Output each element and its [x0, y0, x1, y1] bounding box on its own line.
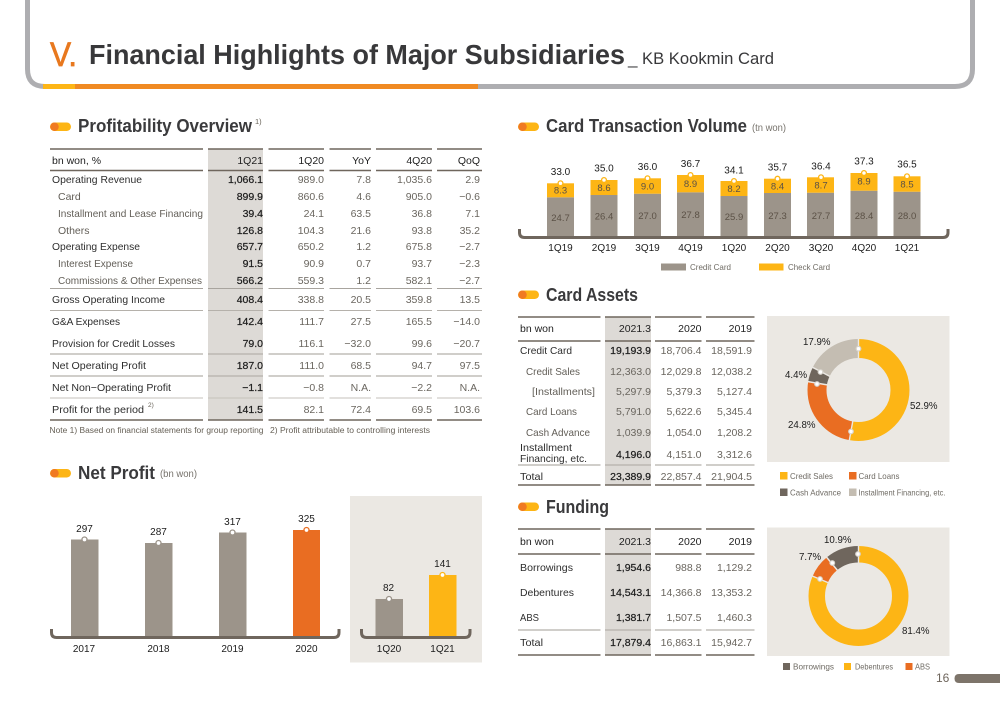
panel: quarterly net profit chart: 1Q20 — [377, 644, 402, 655]
table: funding: bn won — [520, 536, 554, 548]
table: profitability overview: 4.6 — [356, 191, 371, 203]
panel: funding donut chart: 7.7% — [799, 552, 821, 563]
heading: Funding: Funding — [546, 497, 609, 517]
table: profitability overview: Others — [58, 225, 90, 237]
title: _ — [627, 49, 638, 68]
panel: card assets donut chart: 17.9% — [803, 337, 831, 348]
bar chart: annual net profit: 2018 — [147, 644, 170, 655]
table: card assets: 3,312.6 — [717, 449, 752, 461]
bar chart: annual net profit: 2020 — [295, 644, 318, 655]
panel: quarterly net profit chart: 82 — [383, 583, 394, 594]
stacked bar chart: card transaction volume: 37.3 — [854, 157, 874, 168]
table: funding: 1,381.7 — [616, 612, 651, 624]
table: profitability overview: 860.6 — [298, 191, 324, 203]
stacked bar chart: card transaction volume: 1Q21 — [895, 243, 920, 254]
table: profitability overview: 63.5 — [351, 208, 371, 220]
heading: Net Profit: (bn won) — [160, 469, 197, 480]
title — [50, 36, 774, 74]
table: profitability overview: 111.0 — [299, 360, 324, 372]
table: profitability overview: bn won, % — [52, 155, 101, 167]
page number: 16 — [936, 671, 950, 685]
table: profitability overview: 1Q20 — [298, 155, 324, 167]
table: profitability overview: 7.1 — [465, 208, 480, 220]
table: profitability overview: 187.0 — [237, 360, 263, 372]
table: card assets: Cash Advance — [526, 427, 590, 439]
heading: Profitability Overview: Profitability Overview — [78, 116, 253, 136]
bar chart: annual net profit: 287 — [150, 527, 167, 538]
panel: quarterly net profit chart: 1Q21 — [430, 644, 455, 655]
panel: funding donut chart: 10.9% — [824, 535, 852, 546]
table: profitability overview: N.A. — [351, 382, 371, 394]
header frame — [28, 0, 972, 89]
stacked bar chart: card transaction volume: 4Q19 — [678, 243, 703, 254]
table: profitability overview: 566.2 — [237, 275, 263, 287]
table: profitability overview: YoY — [352, 155, 371, 167]
stacked bar chart: card transaction volume: 36.7 — [681, 159, 701, 170]
table: profitability overview: 126.8 — [237, 225, 263, 237]
table: card assets: 2020 — [678, 323, 702, 335]
page number — [936, 671, 1000, 685]
table: profitability overview: Provision for Credit Losses — [52, 338, 175, 350]
table: card assets: 12,363.0 — [610, 366, 651, 378]
table: card assets: 2021.3 — [619, 323, 651, 335]
title: KB Kookmin Card — [642, 49, 774, 68]
table: funding: 2020 — [678, 536, 702, 548]
heading: Card Assets — [518, 285, 638, 305]
table: funding: 15,942.7 — [711, 637, 752, 649]
table: profitability overview: −1.1 — [242, 382, 263, 394]
stacked bar chart: card transaction volume: 27.3 — [768, 211, 787, 222]
table: profitability overview: 13.5 — [460, 294, 480, 306]
bar chart: annual net profit: 317 — [224, 517, 241, 528]
table: profitability overview: 90.9 — [304, 258, 324, 270]
legend: card assets — [780, 471, 946, 498]
stacked bar chart: card transaction volume: 2Q20 — [765, 243, 790, 254]
stacked bar chart: card transaction volume: 9.0 — [641, 182, 654, 192]
table: profitability overview: Net Operating Profit — [52, 360, 146, 372]
table: card assets: 1,039.9 — [616, 427, 651, 439]
table: card assets: 12,029.8 — [661, 366, 702, 378]
heading: Card Assets: Card Assets — [546, 285, 638, 305]
table: profitability overview — [50, 149, 482, 420]
table: funding: 17,879.4 — [610, 637, 651, 649]
table: funding: 2019 — [729, 536, 752, 548]
table: profitability overview: Net Non−Operating Profit — [52, 382, 171, 394]
table: profitability overview: QoQ — [458, 155, 480, 167]
table: card assets: 1,208.2 — [717, 427, 752, 439]
table: profitability overview: 20.5 — [351, 294, 371, 306]
table: profitability overview: G&A Expenses — [52, 316, 120, 328]
stacked bar chart: card transaction volume: 8.9 — [857, 176, 871, 188]
table: card assets: 21,904.5 — [711, 471, 752, 483]
table: profitability overview: Operating Revenue — [52, 174, 142, 186]
table: funding: 988.8 — [675, 562, 702, 574]
table: profitability overview: Operating Expense — [52, 241, 140, 253]
table: funding: 2021.3 — [619, 536, 651, 548]
stacked bar chart: card transaction volume — [520, 157, 948, 254]
stacked bar chart: card transaction volume: 2Q19 — [592, 243, 617, 254]
heading: Profitability Overview: 1) — [255, 117, 262, 126]
legend: card transaction volume — [661, 262, 830, 272]
panel: card assets donut chart — [767, 316, 950, 462]
table: profitability overview: 72.4 — [351, 404, 371, 416]
stacked bar chart: card transaction volume: 3Q19 — [635, 243, 660, 254]
bar chart: annual net profit — [52, 514, 339, 655]
stacked bar chart: card transaction volume: 36.0 — [638, 162, 658, 173]
table: profitability overview: 1.2 — [356, 241, 371, 253]
table: profitability overview: 1Q21 — [237, 155, 263, 167]
panel: quarterly net profit chart: 141 — [434, 559, 451, 570]
table note: 2) Profit attributable to controlling interests — [270, 426, 430, 435]
table note: Note 1) Based on financial statements for group reporting — [50, 426, 264, 435]
stacked bar chart: card transaction volume: 8.5 — [900, 180, 914, 190]
table: profitability overview: −2.7 — [459, 241, 480, 253]
table: profitability overview: 99.6 — [412, 338, 432, 350]
table: profitability overview: 559.3 — [298, 275, 324, 287]
table: card assets: 5,379.3 — [666, 386, 702, 398]
stacked bar chart: card transaction volume: 3Q20 — [809, 243, 834, 254]
table: profitability overview: 165.5 — [406, 316, 432, 328]
stacked bar chart: card transaction volume: 8.7 — [814, 180, 828, 192]
panel: funding donut chart: 81.4% — [902, 626, 930, 637]
panel: card assets donut chart: 24.8% — [788, 420, 816, 431]
stacked bar chart: card transaction volume: 4Q20 — [852, 243, 877, 254]
title: Financial Highlights of Major Subsidiaries — [89, 39, 625, 70]
table: profitability overview: −0.6 — [459, 191, 480, 203]
table: profitability overview: 7.8 — [356, 174, 371, 186]
table: profitability overview: Card — [58, 191, 81, 203]
table: card assets: 4,151.0 — [666, 449, 702, 461]
table: profitability overview: 2) — [148, 402, 154, 409]
table: profitability overview: 104.3 — [298, 225, 324, 237]
stacked bar chart: card transaction volume: 1Q20 — [722, 243, 747, 254]
stacked bar chart: card transaction volume: 8.9 — [684, 179, 697, 190]
table: profitability overview: 35.2 — [460, 225, 480, 237]
table: profitability overview: Commissions & Other Expenses — [58, 275, 202, 287]
table: profitability overview: 650.2 — [298, 241, 324, 253]
table: profitability overview: 82.1 — [304, 404, 324, 416]
table: card assets: [Installments] — [532, 386, 595, 398]
table: card assets: Credit Sales — [526, 366, 580, 378]
table: profitability overview: N.A. — [460, 382, 480, 394]
table: funding — [518, 529, 754, 655]
table: profitability overview: −2.2 — [411, 382, 432, 394]
table: profitability overview: 21.6 — [351, 225, 371, 237]
stacked bar chart: card transaction volume: 28.4 — [855, 211, 873, 222]
table: profitability overview: 675.8 — [406, 241, 432, 253]
table: profitability overview: 4Q20 — [406, 155, 432, 167]
title: V. — [50, 36, 77, 74]
panel: quarterly net profit chart — [350, 496, 482, 662]
legend: funding: Debentures — [855, 662, 893, 672]
stacked bar chart: card transaction volume: 24.7 — [551, 213, 570, 224]
table: funding: 13,353.2 — [711, 587, 752, 599]
heading: Net Profit: Net Profit — [78, 463, 155, 483]
table: funding: 1,460.3 — [717, 612, 752, 624]
table: card assets: 19,193.9 — [610, 345, 651, 357]
table: card assets: 12,038.2 — [711, 366, 752, 378]
table: funding: 1,507.5 — [666, 612, 702, 624]
table: funding: ABS — [520, 612, 539, 624]
table: profitability overview: −14.0 — [453, 316, 480, 328]
table: profitability overview: 111.7 — [299, 316, 324, 328]
stacked bar chart: card transaction volume: 28.0 — [898, 211, 916, 222]
table: card assets: 1,054.0 — [666, 427, 702, 439]
table: card assets: 18,591.9 — [711, 345, 752, 357]
table: profitability overview: 0.7 — [356, 258, 371, 270]
bar chart: annual net profit: 325 — [298, 514, 315, 525]
table: card assets: Installment — [520, 442, 572, 454]
table: funding: Borrowings — [520, 562, 573, 574]
table: profitability overview: 116.1 — [298, 338, 324, 350]
table: profitability overview: Profit for the period — [52, 404, 144, 416]
table: profitability overview: 1,035.6 — [397, 174, 432, 186]
stacked bar chart: card transaction volume: 8.4 — [771, 182, 784, 192]
stacked bar chart: card transaction volume: 25.9 — [725, 212, 743, 223]
table: funding: 14,366.8 — [661, 587, 702, 599]
table: profitability overview: 359.8 — [406, 294, 432, 306]
table: card assets: Credit Card — [520, 345, 572, 357]
legend: card transaction volume: Check Card — [788, 262, 830, 272]
stacked bar chart: card transaction volume: 26.4 — [595, 212, 613, 222]
legend: card assets: Card Loans — [858, 471, 900, 481]
table: profitability overview: 97.5 — [460, 360, 480, 372]
table: profitability overview: 408.4 — [237, 294, 263, 306]
table: card assets: 23,389.9 — [610, 471, 651, 483]
stacked bar chart: card transaction volume: 36.5 — [897, 160, 917, 171]
table: card assets: 5,791.0 — [616, 406, 651, 418]
panel: card assets donut chart: 52.9% — [910, 401, 938, 412]
heading: Funding — [518, 497, 609, 517]
legend: card assets: Cash Advance — [790, 488, 841, 498]
table: profitability overview: 27.5 — [351, 316, 371, 328]
stacked bar chart: card transaction volume: 8.6 — [597, 183, 611, 194]
table: card assets: 2019 — [729, 323, 752, 335]
table: profitability overview: −2.3 — [459, 258, 480, 270]
table: profitability overview: 657.7 — [237, 241, 263, 253]
table: profitability overview: −20.7 — [453, 338, 480, 350]
table: profitability overview: 79.0 — [243, 338, 263, 350]
table: profitability overview: Interest Expense — [58, 258, 133, 270]
heading: Net Profit — [50, 463, 197, 483]
heading: Card Transaction Volume: Card Transaction Volume — [546, 116, 747, 136]
table: profitability overview: −32.0 — [344, 338, 371, 350]
stacked bar chart: card transaction volume: 27.8 — [681, 210, 700, 221]
table: profitability overview: 91.5 — [243, 258, 263, 270]
table: funding: 16,863.1 — [661, 637, 702, 649]
table: card assets: 5,297.9 — [616, 386, 651, 398]
table: card assets: 18,706.4 — [661, 345, 702, 357]
stacked bar chart: card transaction volume: 8.3 — [554, 186, 567, 196]
legend: card transaction volume: Credit Card — [690, 262, 731, 272]
table: profitability overview: 989.0 — [298, 174, 324, 186]
panel: funding donut chart — [767, 528, 950, 656]
legend: funding: Borrowings — [793, 662, 834, 672]
table: profitability overview: 141.5 — [237, 404, 263, 416]
legend: funding: ABS — [915, 662, 930, 672]
stacked bar chart: card transaction volume: 34.1 — [724, 165, 744, 176]
table: profitability overview: 905.0 — [406, 191, 432, 203]
table: card assets: Card Loans — [526, 406, 577, 418]
table: profitability overview: 2.9 — [465, 174, 480, 186]
panel: card assets donut chart: 4.4% — [785, 370, 807, 381]
stacked bar chart: card transaction volume: 27.7 — [812, 211, 830, 222]
bar chart: annual net profit: 297 — [76, 524, 93, 535]
table: card assets: 5,345.4 — [717, 406, 752, 418]
stacked bar chart: card transaction volume: 33.0 — [551, 167, 571, 178]
table: profitability overview: −0.8 — [303, 382, 324, 394]
table: profitability overview: 94.7 — [412, 360, 432, 372]
stacked bar chart: card transaction volume: 1Q19 — [548, 243, 573, 254]
table: profitability overview: 69.5 — [412, 404, 432, 416]
table: profitability overview: Gross Operating Income — [52, 294, 165, 306]
table: profitability overview: 36.8 — [412, 208, 432, 220]
table: profitability overview: 1,066.1 — [228, 174, 263, 186]
table: funding: Total — [520, 637, 543, 649]
table: profitability overview: 142.4 — [237, 316, 263, 328]
table: profitability overview: 39.4 — [243, 208, 263, 220]
table: funding: 1,129.2 — [717, 562, 752, 574]
bar chart: annual net profit: 2019 — [221, 644, 244, 655]
table: profitability overview: 93.7 — [412, 258, 432, 270]
table: profitability overview: 103.6 — [454, 404, 480, 416]
table: profitability overview: 1.2 — [356, 275, 371, 287]
legend: funding — [783, 662, 930, 672]
heading: Card Transaction Volume: (tn won) — [752, 123, 786, 134]
table: funding: Debentures — [520, 587, 574, 599]
stacked bar chart: card transaction volume: 27.0 — [638, 211, 657, 222]
table: card assets: Total — [520, 471, 543, 483]
table: profitability overview: −2.7 — [459, 275, 480, 287]
table: card assets: Financing, etc. — [520, 453, 587, 465]
table: profitability overview: 582.1 — [406, 275, 432, 287]
legend: card assets: Installment Financing, etc. — [858, 488, 946, 498]
table: funding: 14,543.1 — [610, 587, 651, 599]
stacked bar chart: card transaction volume: 35.7 — [768, 163, 788, 174]
stacked bar chart: card transaction volume: 36.4 — [811, 161, 831, 172]
table: profitability overview: Installment and Lease Financing — [58, 208, 203, 220]
stacked bar chart: card transaction volume: 35.0 — [594, 164, 614, 175]
table: card assets: 22,857.4 — [661, 471, 702, 483]
bar chart: annual net profit: 2017 — [73, 644, 96, 655]
legend: card assets: Credit Sales — [790, 471, 833, 481]
table: funding: 1,954.6 — [616, 562, 651, 574]
table: profitability overview: 24.1 — [304, 208, 324, 220]
stacked bar chart: card transaction volume: 8.2 — [727, 184, 741, 195]
table: card assets — [518, 317, 754, 485]
table: profitability overview: 68.5 — [351, 360, 371, 372]
table: profitability overview: 899.9 — [237, 191, 263, 203]
table note — [50, 426, 430, 435]
table: card assets: 5,622.6 — [666, 406, 702, 418]
table: card assets: bn won — [520, 323, 554, 335]
table: profitability overview: 93.8 — [412, 225, 432, 237]
table: card assets: 4,196.0 — [616, 449, 651, 461]
table: card assets: 5,127.4 — [717, 386, 752, 398]
table: profitability overview: 338.8 — [298, 294, 324, 306]
